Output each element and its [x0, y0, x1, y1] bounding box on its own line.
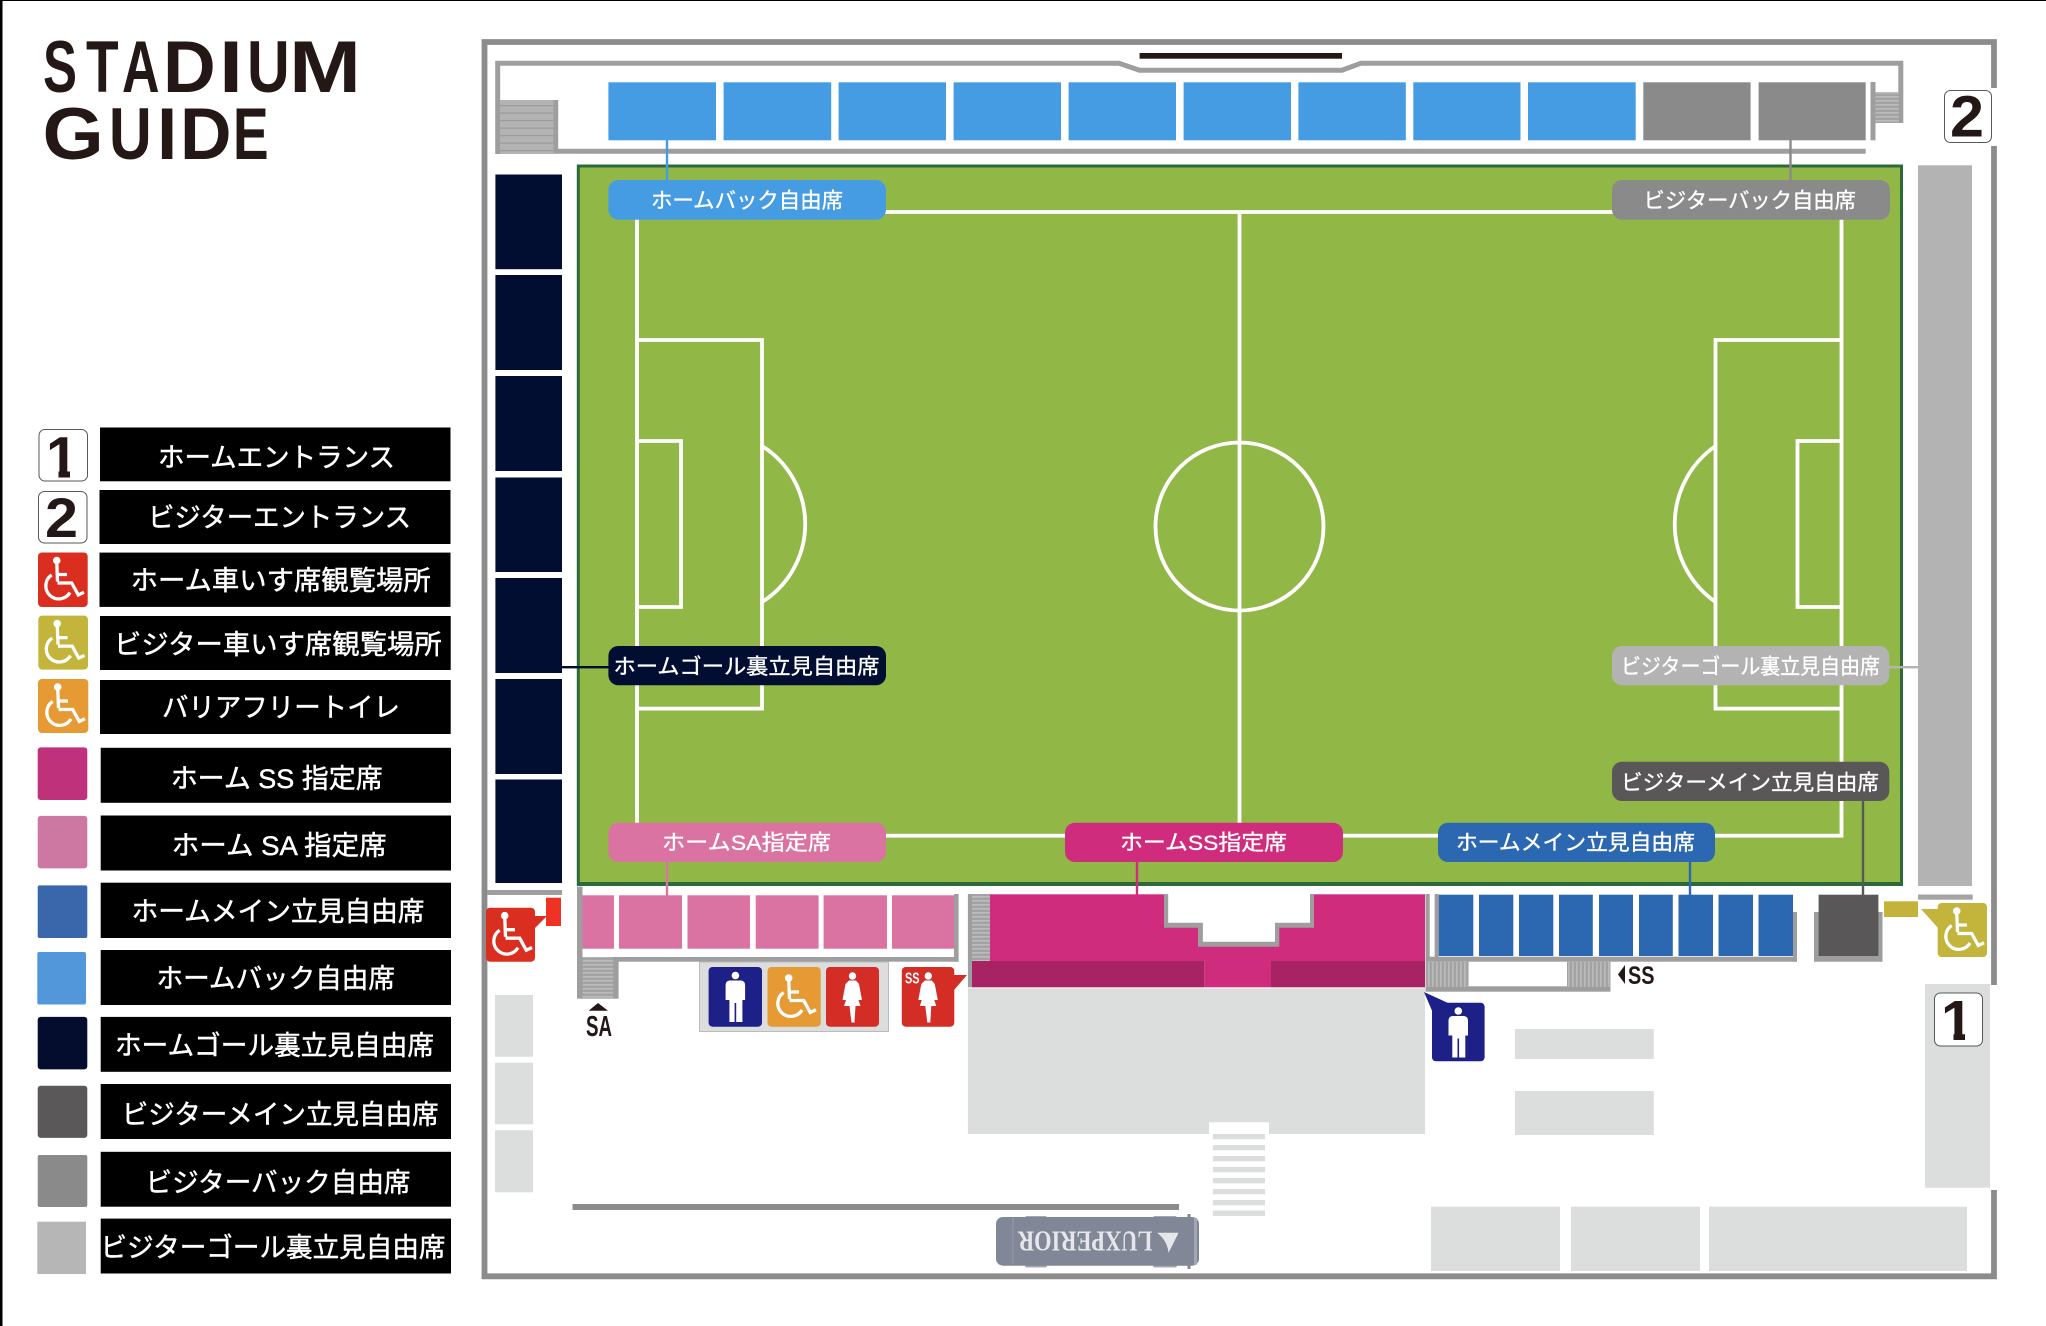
label: home goal: ホームゴール裏立見自由席	[614, 655, 880, 679]
title: S	[43, 27, 77, 108]
home goal standing blocks	[495, 174, 562, 883]
icon: accessible toilet	[768, 967, 821, 1027]
SA direction marker	[586, 1003, 612, 1043]
legend: barrier free toilet	[38, 679, 451, 734]
connector: home back	[666, 140, 668, 182]
stair top right	[1870, 82, 1899, 140]
SA direction marker: SA	[586, 1011, 612, 1043]
bottom grey blocks	[1431, 1207, 1967, 1271]
left goal box	[637, 441, 681, 607]
legend: home entrance	[38, 428, 450, 482]
title: A	[122, 27, 160, 108]
legend: visitor main standing	[38, 1084, 451, 1139]
entrance 1 badge: 1	[1941, 989, 1973, 1053]
connector: home goal	[562, 666, 610, 668]
legend: visitor goal standing	[37, 1219, 451, 1274]
title: U	[109, 94, 152, 175]
home wheelchair area marker	[486, 898, 561, 962]
connector: home main	[1689, 860, 1691, 896]
entrance 1 badge	[1934, 992, 1983, 1046]
legend: home entrance: ホームエントランス	[158, 443, 395, 473]
label: home back: ホームバック自由席	[651, 189, 843, 213]
pitch	[577, 166, 1903, 886]
outer boundary wall	[484, 42, 1994, 1276]
entrance 2 badge	[1944, 85, 1992, 150]
label: visitor goal: ビジターゴール裏立見自由席	[1621, 655, 1880, 679]
connector: home SA	[666, 860, 668, 896]
legend: home wheelchair area	[38, 552, 450, 607]
bus: LUXPERIOR	[1017, 1224, 1152, 1256]
centre circle	[1156, 442, 1324, 610]
legend: home SA reserved: ホーム SA 指定席	[172, 831, 387, 861]
title	[42, 27, 361, 175]
legend: home back: ホームバック自由席	[156, 964, 395, 994]
label: home back	[608, 180, 886, 220]
title: D	[163, 27, 216, 108]
parking blocks left	[495, 995, 533, 1192]
home SA seating	[577, 887, 959, 999]
concourse area	[968, 988, 1425, 1134]
title: I	[157, 94, 177, 175]
legend: visitor entrance	[38, 486, 450, 549]
icon: women toilet	[826, 967, 879, 1027]
visitor goal standing block	[1918, 165, 1972, 886]
upper stand walls	[498, 63, 1901, 154]
title: E	[233, 94, 269, 175]
legend: home goal standing	[38, 1017, 451, 1072]
VIP notch wall	[1164, 894, 1314, 947]
right penalty arc	[1675, 446, 1716, 602]
label: visitor main: ビジターメイン立見自由席	[1621, 771, 1879, 795]
legend: home SS reserved	[38, 747, 451, 803]
halfway line	[1238, 212, 1241, 836]
icon: SS women toilet	[902, 967, 967, 1027]
legend: visitor goal standing: ビジターゴール裏立見自由席	[100, 1233, 446, 1263]
legend: home wheelchair area: ホーム車いす席観覧場所	[131, 566, 431, 596]
top scoreboard bar	[1140, 53, 1342, 59]
legend: home main standing	[38, 883, 451, 938]
toilet group	[700, 962, 888, 1032]
legend: visitor back: ビジターバック自由席	[146, 1168, 410, 1198]
label: visitor back: ビジターバック自由席	[1644, 189, 1856, 213]
left penalty arc	[762, 446, 805, 602]
legend: home goal standing: ホームゴール裏立見自由席	[115, 1031, 434, 1061]
title: T	[86, 27, 119, 108]
home SS seating	[968, 893, 1425, 987]
visitor main seating	[1814, 895, 1882, 962]
title: M	[289, 27, 361, 108]
touch and goal lines	[637, 212, 1842, 836]
icon: men toilet marker	[1424, 992, 1485, 1061]
icon: SS women toilet: SS	[905, 970, 920, 988]
title: I	[219, 27, 243, 108]
legend: home SS reserved: ホーム SS 指定席	[171, 764, 383, 794]
entrance 1 area	[1925, 984, 1990, 1188]
legend: visitor wheelchair area	[38, 616, 451, 670]
right penalty box	[1716, 340, 1842, 709]
bus	[996, 1214, 1199, 1269]
label: home SA: ホームSA指定席	[662, 831, 831, 855]
visitor wheelchair area marker	[1884, 901, 1987, 957]
lower boundary bar	[572, 1204, 1179, 1210]
label: home main	[1438, 823, 1715, 862]
legend: visitor main standing: ビジターメイン立見自由席	[122, 1100, 439, 1130]
title: G	[42, 94, 104, 175]
legend: home SA reserved	[38, 816, 451, 870]
entrance stairs	[1209, 1122, 1269, 1216]
right goal box	[1798, 441, 1842, 607]
left penalty box	[637, 340, 762, 709]
connector: home SS	[1136, 860, 1138, 896]
label: home SS: ホームSS指定席	[1120, 831, 1287, 855]
legend: visitor back	[38, 1152, 451, 1207]
home back seating blocks	[608, 82, 1636, 140]
label: home goal	[608, 646, 886, 685]
label: visitor goal	[1612, 646, 1889, 685]
legend: visitor wheelchair area: ビジター車いす席観覧場所	[114, 630, 442, 660]
connector: visitor back	[1789, 140, 1792, 182]
mid grey blocks	[1515, 1029, 1654, 1135]
connector: visitor goal	[1888, 666, 1918, 668]
title: U	[247, 27, 290, 108]
left wall segment	[487, 890, 562, 895]
legend: home main standing: ホームメイン立見自由席	[132, 897, 424, 927]
legend: home entrance: 1	[46, 426, 78, 490]
panel: stadium map	[484, 42, 1994, 1276]
legend: barrier free toilet: バリアフリートイレ	[162, 693, 400, 723]
label: home main: ホームメイン立見自由席	[1456, 831, 1695, 855]
entrance 2 badge: 2	[1950, 85, 1984, 150]
icon: men toilet	[709, 967, 762, 1027]
label: visitor main	[1612, 762, 1889, 801]
label: visitor back	[1612, 180, 1890, 220]
connector: visitor main	[1862, 800, 1864, 895]
title: D	[180, 94, 232, 175]
SS direction marker: SS	[1628, 962, 1654, 990]
stair top left	[500, 100, 554, 154]
back stand lower wall	[556, 100, 1866, 151]
panel: legend	[37, 426, 451, 1274]
home main seating	[1426, 894, 1797, 992]
label: home SS	[1065, 823, 1343, 862]
visitor back seating blocks	[1643, 82, 1866, 140]
label: home SA	[608, 823, 886, 862]
SS direction marker	[1618, 962, 1654, 990]
legend: visitor entrance: ビジターエントランス	[148, 503, 411, 533]
visitor goal lower wall	[1918, 894, 1973, 900]
legend: visitor entrance: 2	[45, 486, 78, 549]
legend: home back	[37, 950, 451, 1005]
